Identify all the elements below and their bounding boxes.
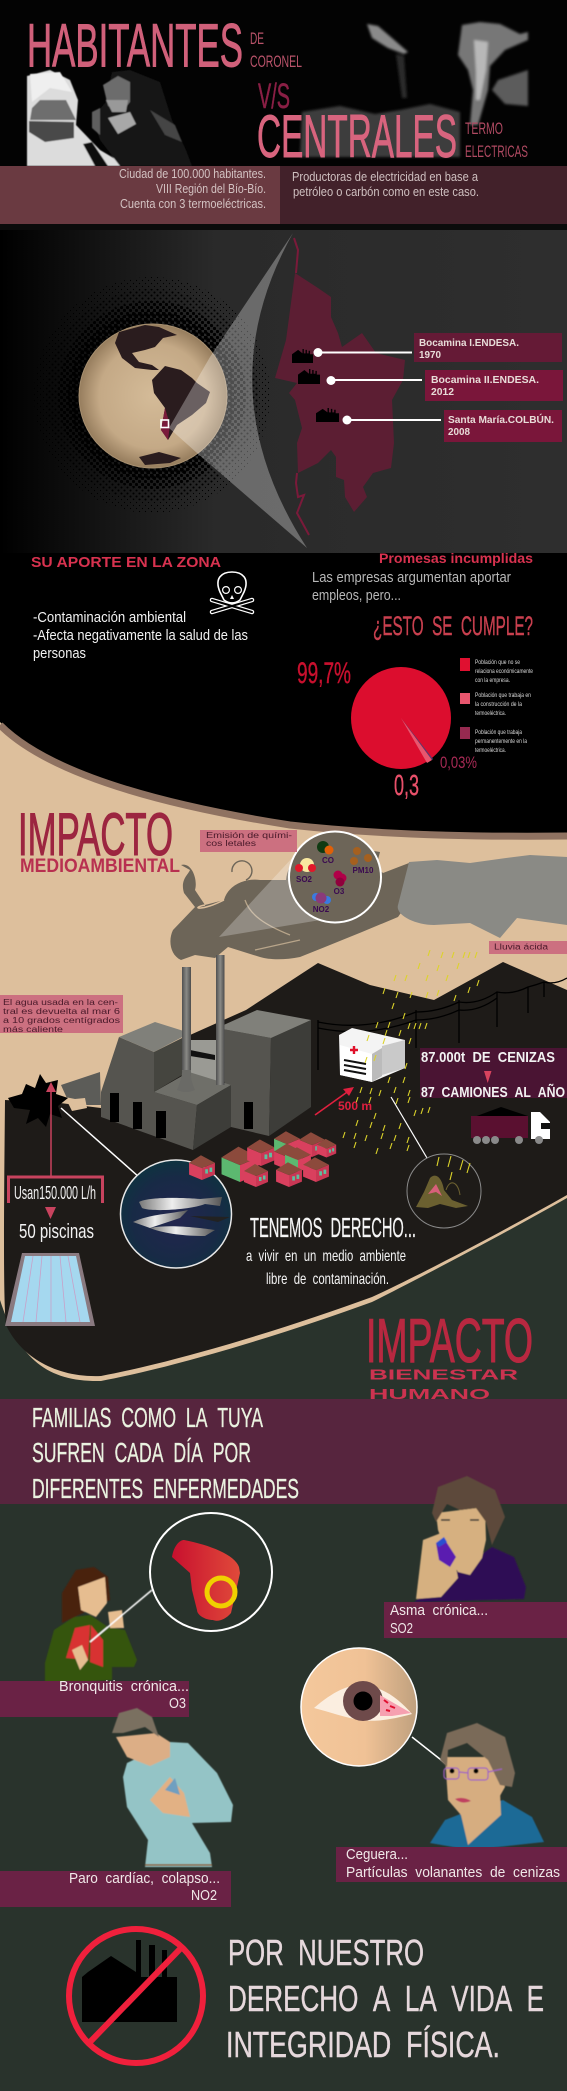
text: closing statement: POR NUESTRO bbox=[228, 1932, 424, 1973]
callout: Bocamina II: Bocamina II.ENDESA. bbox=[431, 375, 539, 386]
photo: people with masks bbox=[27, 70, 192, 166]
text: empresas bbox=[312, 569, 511, 604]
discharge pipe bbox=[61, 1072, 101, 1111]
callout: Bocamina I: 1970 bbox=[419, 350, 441, 361]
panel: intro left: Ciudad de 100.000 habitantes. bbox=[119, 166, 266, 181]
text: tenemos derecho: a vivir en un medio ambiente bbox=[246, 1248, 406, 1265]
callout: Santa Maria bbox=[342, 410, 562, 442]
panel: intro right: Productoras de electricidad en base a bbox=[292, 169, 479, 184]
icon: factory 1 bbox=[292, 349, 313, 363]
callout: agua bbox=[0, 995, 123, 1034]
smoke cloud bbox=[170, 843, 420, 960]
callout: agua: tral es devuelta al mar 6 bbox=[3, 1007, 121, 1016]
callout: Bocamina I: Bocamina I.ENDESA. bbox=[419, 338, 519, 349]
icon: factory 3 bbox=[316, 408, 339, 422]
panel: intro left: Cuenta con 3 termoeléctricas. bbox=[120, 196, 266, 211]
figure: woman with glasses bbox=[430, 1723, 544, 1850]
smoke plume grey bbox=[398, 855, 567, 938]
banner: familias bbox=[0, 1399, 567, 1504]
legend: Población que trabaja bbox=[475, 730, 523, 736]
magnifying cone bbox=[169, 233, 307, 548]
heading: bienestar humano: HUMANO bbox=[369, 1386, 491, 1403]
magnifier: bronchus bbox=[150, 1513, 272, 1631]
text: contaminacion list: personas bbox=[33, 645, 86, 662]
spill splash bbox=[8, 1074, 68, 1127]
heading: termo electricas: TERMO bbox=[465, 119, 503, 138]
acid rain bbox=[343, 950, 479, 1154]
icon: factory 2 bbox=[298, 369, 320, 384]
callout: Bocamina II bbox=[326, 370, 563, 401]
legend bbox=[460, 658, 534, 754]
legend: permanentemente en la bbox=[475, 739, 528, 745]
photo: smoke stacks bbox=[300, 22, 528, 157]
label: asma: Asma crónica... bbox=[390, 1602, 488, 1619]
label: bronquitis: O3 bbox=[169, 1695, 186, 1712]
panel: aporte en la zona bbox=[0, 550, 567, 843]
panel: intro left bbox=[0, 166, 280, 224]
callout: emision: cos letales bbox=[206, 839, 256, 848]
legend: termoeléctrica. bbox=[475, 711, 506, 717]
callout: Santa Maria: 2008 bbox=[448, 427, 470, 438]
banner: familias: SUFREN CADA DÍA POR bbox=[32, 1437, 251, 1468]
text: empresas: Las empresas argumentan aportar bbox=[312, 569, 511, 586]
label: 0,3: 0,3 bbox=[394, 770, 419, 802]
panel: intro right: petróleo o carbón como en este caso. bbox=[293, 184, 479, 199]
stat: cenizas bbox=[420, 1048, 567, 1101]
callout: emision bbox=[200, 830, 297, 852]
magnifier: chemicals: SO2 bbox=[296, 875, 313, 884]
callout: emision: Emisión de quími- bbox=[206, 831, 292, 840]
label: paro cardiaco bbox=[0, 1870, 231, 1907]
icon: truck bbox=[471, 1107, 550, 1144]
ground and mountains bbox=[4, 962, 567, 1376]
arrow: water intake bbox=[46, 1082, 56, 1177]
callout: Santa Maria: Santa María.COLBÚN. bbox=[448, 413, 554, 426]
legend: Población que no se bbox=[475, 660, 521, 666]
magnifier: chemicals: NO2 bbox=[313, 905, 330, 914]
header: title block bbox=[0, 0, 567, 170]
pointer: plant bbox=[391, 1097, 427, 1158]
label: ceguera: Ceguera... bbox=[346, 1846, 408, 1863]
text: empresas: empleos, pero... bbox=[312, 587, 401, 604]
legend: termoeléctrica. bbox=[475, 748, 506, 754]
heading: termo electricas bbox=[465, 119, 528, 161]
heading: de coronel: CORONEL bbox=[250, 52, 302, 71]
chart: pie bbox=[351, 667, 451, 769]
figure: asthma man bbox=[414, 1476, 526, 1602]
panel: intro right bbox=[280, 166, 567, 224]
label: asma: SO2 bbox=[390, 1620, 413, 1637]
callout: lluvia acida: Lluvia ácida bbox=[494, 942, 549, 952]
panel: impacto medioambiental bbox=[0, 722, 567, 1381]
halftone dots bbox=[34, 277, 270, 513]
heading: de coronel: DE bbox=[250, 29, 264, 48]
label: paro cardiaco: NO2 bbox=[191, 1887, 217, 1904]
magnifier: chemicals: PM10 bbox=[353, 866, 374, 875]
factory bbox=[101, 955, 311, 1150]
label: ceguera bbox=[336, 1846, 567, 1882]
icon: globe bbox=[79, 324, 227, 468]
heading: promesas incumplidas: Promesas incumplidas bbox=[379, 550, 533, 566]
label: 0,03: 0,03% bbox=[440, 753, 477, 772]
legend: con la empresa. bbox=[475, 678, 510, 684]
heading: habitantes: HABITANTES bbox=[27, 12, 243, 80]
figure: girl with bronchitis bbox=[45, 1567, 152, 1684]
text: tenemos derecho bbox=[246, 1212, 416, 1288]
callout: Bocamina I bbox=[314, 333, 562, 362]
magnifier cone bbox=[219, 857, 362, 937]
arrow: 500 m bbox=[315, 1087, 372, 1115]
heading: bienestar humano bbox=[369, 1366, 518, 1403]
label: paro cardiaco: Paro cardíac, colapso... bbox=[69, 1870, 220, 1887]
houses bbox=[189, 1131, 336, 1187]
panel: intro left: VIII Región del Bío-Bío. bbox=[156, 181, 266, 196]
heading: v/s: V/S bbox=[258, 77, 290, 116]
heading: su aporte: SU APORTE EN LA ZONA bbox=[31, 554, 221, 571]
text: contaminacion list: -Contaminación ambiental bbox=[33, 609, 186, 626]
magnifier: plant bbox=[407, 1154, 481, 1228]
stat: water use: 50 piscinas bbox=[19, 1221, 94, 1243]
panel: impacto bienestar humano bbox=[366, 1307, 533, 1403]
magnifier: eye bbox=[301, 1648, 450, 1767]
label: bronquitis bbox=[0, 1678, 189, 1717]
text: closing statement bbox=[226, 1932, 544, 2065]
icon: skull bbox=[212, 572, 252, 612]
callout: Bocamina II: 2012 bbox=[431, 387, 454, 398]
label: bronquitis: Bronquitis crónica... bbox=[59, 1678, 189, 1695]
callout: agua: a 10 grados centígrados bbox=[3, 1016, 120, 1025]
legend: relaciona económicamente bbox=[475, 669, 534, 675]
power lines bbox=[318, 978, 567, 1070]
text: contaminacion list: -Afecta negativamente la salud de las bbox=[33, 627, 248, 644]
heading: impacto: IMPACTO bbox=[18, 801, 173, 868]
heading: medioambiental: MEDIOAMBIENTAL bbox=[20, 856, 180, 877]
icon: hospital bbox=[339, 1028, 405, 1082]
label: asma bbox=[384, 1602, 567, 1638]
icon: no factory sign bbox=[69, 1929, 203, 2063]
heading: de coronel bbox=[250, 29, 302, 71]
stat: water use: Usan150.000 L/h bbox=[14, 1183, 96, 1203]
icon: pool bbox=[5, 1253, 95, 1326]
callout: agua: El agua usada en la cen- bbox=[3, 998, 118, 1007]
text: tenemos derecho: TENEMOS DERECHO... bbox=[250, 1212, 416, 1243]
magnifier: chemicals: O3 bbox=[334, 887, 345, 896]
stat: water use bbox=[8, 1177, 102, 1243]
map: region bbox=[275, 238, 405, 535]
arrow: 500 m: 500 m bbox=[338, 1099, 372, 1113]
banner: familias: FAMILIAS COMO LA TUYA bbox=[32, 1402, 263, 1433]
icon: location marker bbox=[161, 420, 168, 428]
figure: man with chest pain bbox=[112, 1708, 233, 1867]
magnifier: whales bbox=[120, 1160, 232, 1268]
magnifier: chemicals bbox=[289, 832, 381, 922]
callout: lluvia acida bbox=[489, 941, 567, 954]
legend: la construcción de la bbox=[475, 702, 523, 708]
heading: bienestar humano: BIENESTAR bbox=[369, 1366, 518, 1384]
banner: familias: DIFERENTES ENFERMEDADES bbox=[32, 1473, 299, 1504]
text: contaminacion list bbox=[33, 609, 248, 662]
panel: location map bbox=[0, 230, 567, 553]
legend: Población que trabaja en bbox=[475, 693, 531, 699]
pointer: whales bbox=[61, 1108, 139, 1177]
magnifier: chemicals: CO bbox=[322, 856, 334, 865]
text: tenemos derecho: libre de contaminación. bbox=[266, 1271, 389, 1288]
label: 99,7: 99,7% bbox=[297, 657, 351, 690]
callout: agua: más caliente bbox=[3, 1025, 64, 1034]
